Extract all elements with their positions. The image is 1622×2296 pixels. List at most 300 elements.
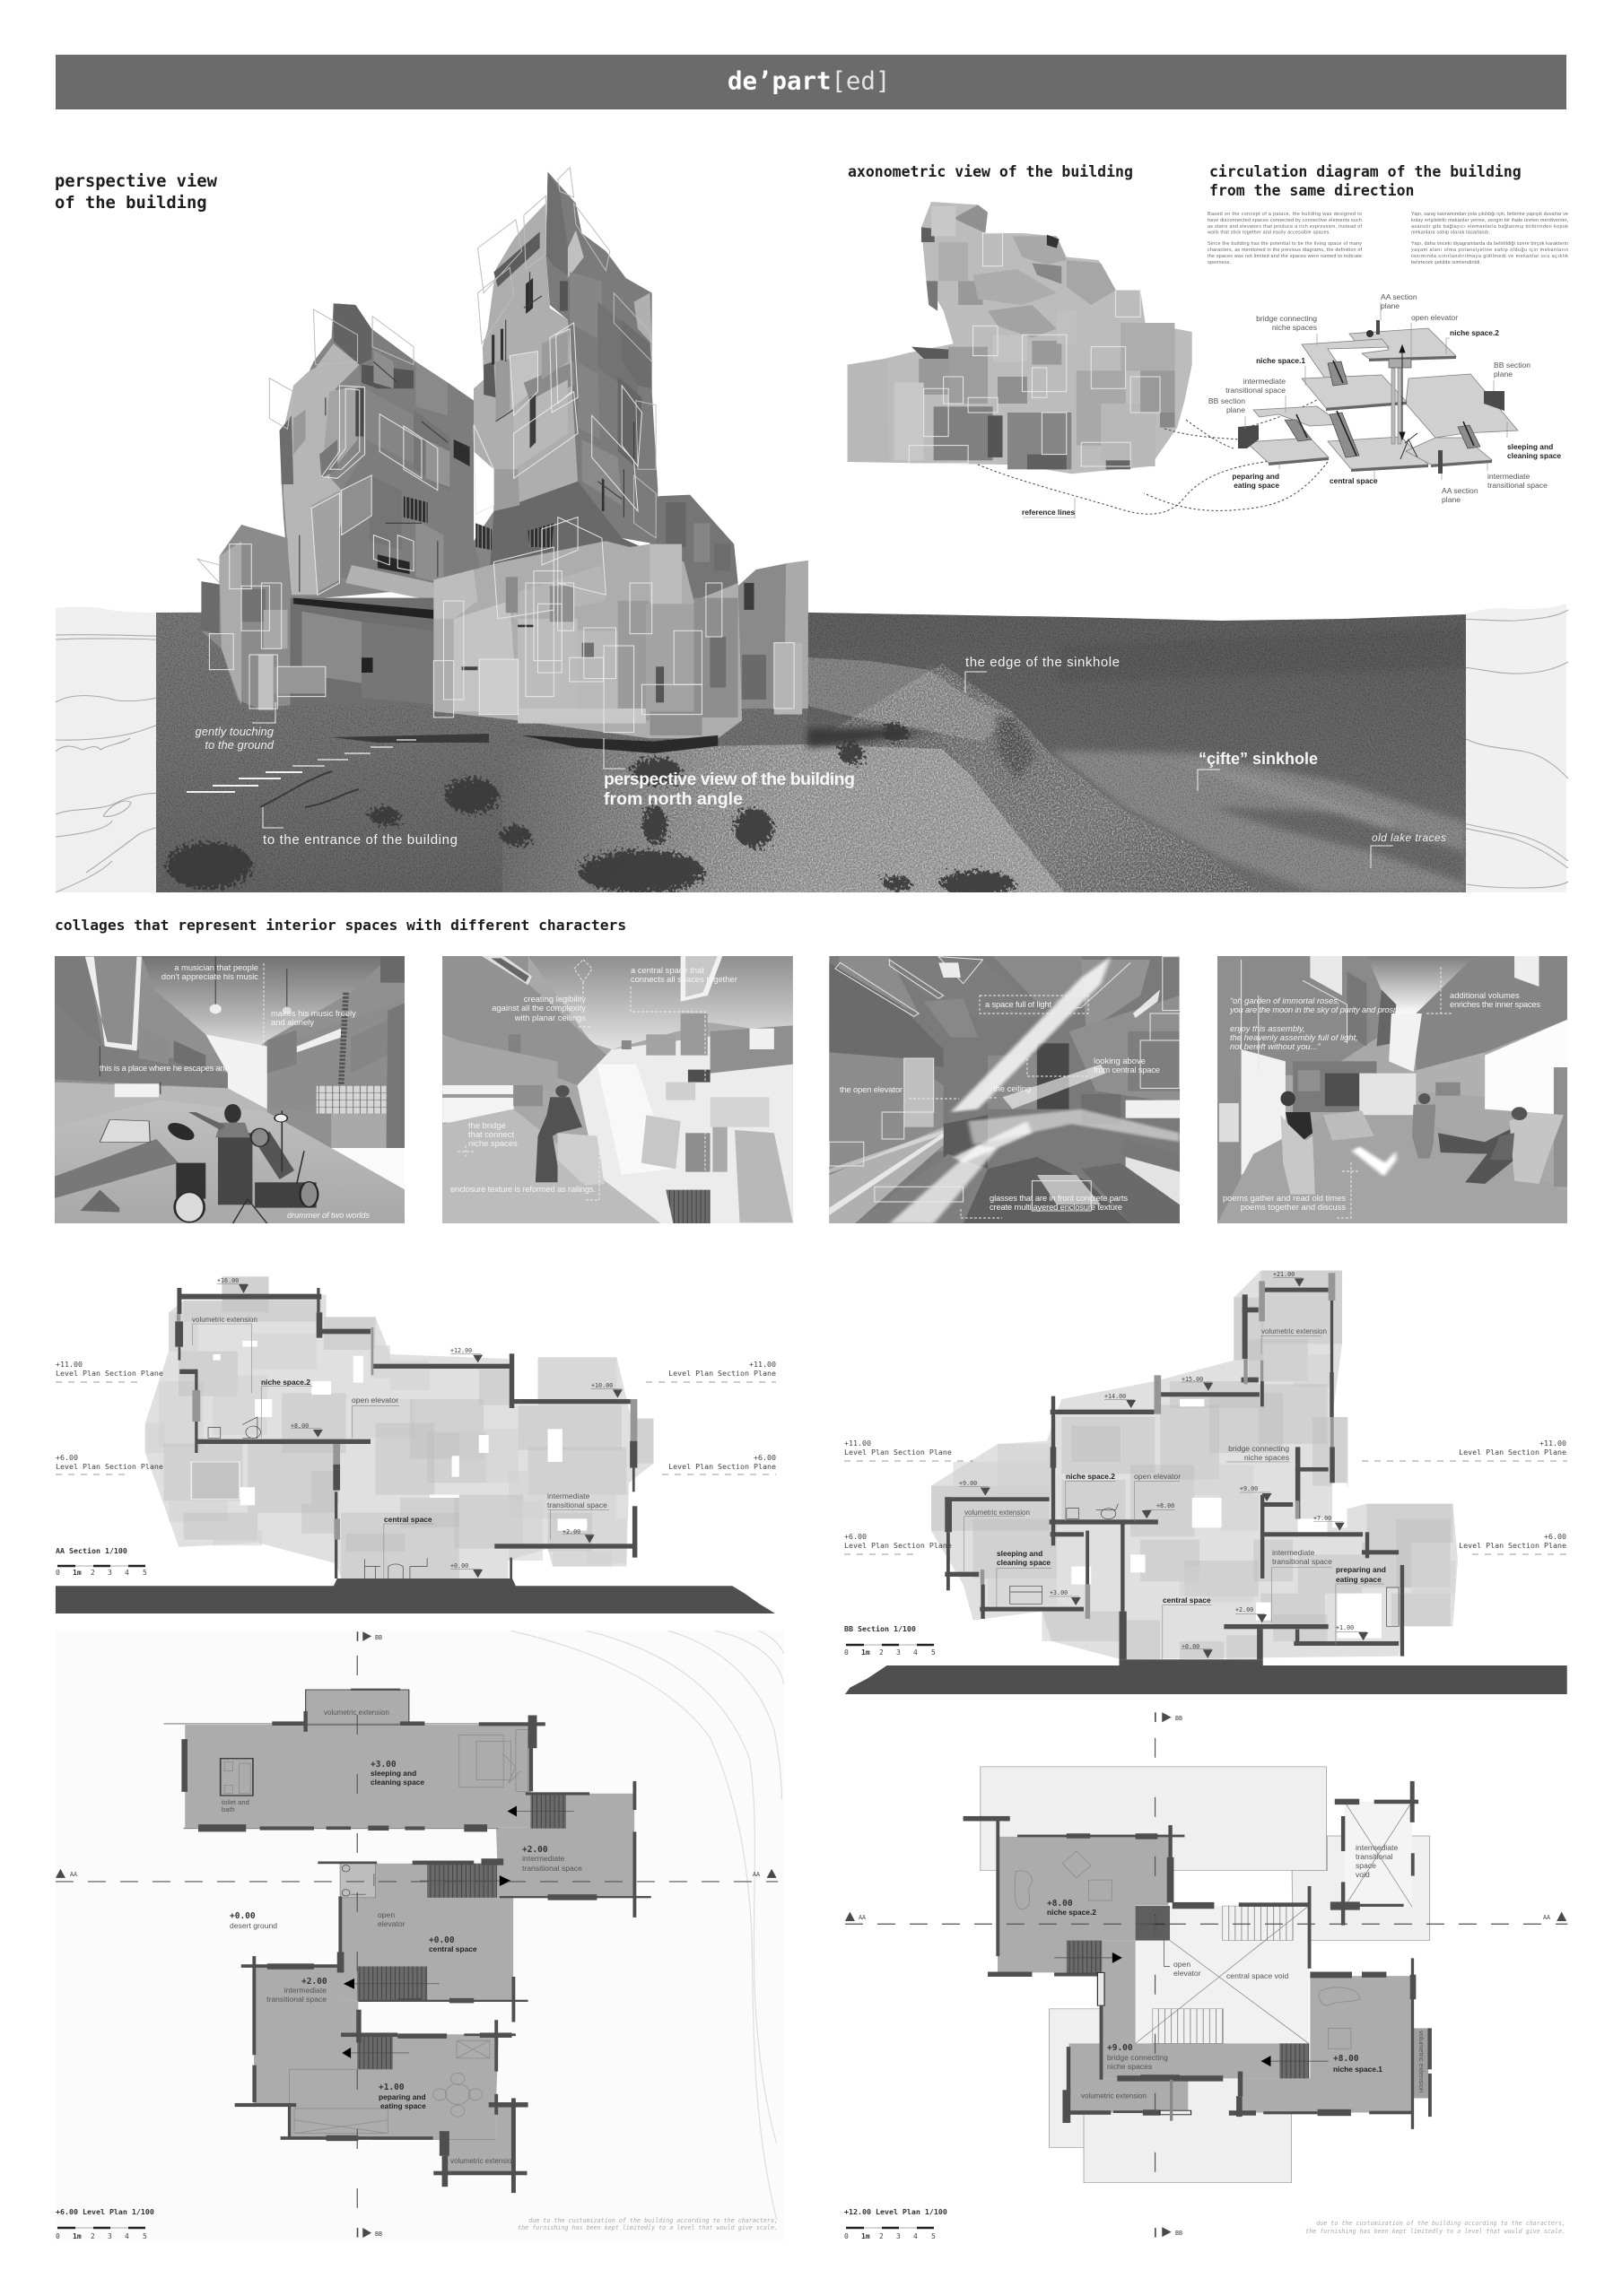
- AA section plane labels: +6.00: [56, 1453, 78, 1462]
- collage poets labels: “oh garden of immortal roses,: [1230, 996, 1339, 1005]
- plan +12.00 title and scale: 2: [879, 2232, 884, 2240]
- plan +6.00 labels: +0.00: [429, 1935, 455, 1945]
- label: gently touching: to the ground: [205, 738, 275, 752]
- section BB texts: +9.00: [1240, 1485, 1258, 1492]
- bridge counter: [558, 1133, 605, 1186]
- plan +6.00 title and scale: 1m: [73, 2232, 82, 2240]
- plan +6.00 title and scale: 5: [143, 2232, 147, 2240]
- ground: [56, 1578, 775, 1613]
- cliff face: [970, 701, 1263, 892]
- diagram labels: niche space.2: [1450, 328, 1499, 337]
- section AA texts: [192, 1277, 613, 1570]
- collage central space labels: connects all spaces together: [631, 974, 737, 984]
- diagram labels: sleeping and: [1507, 442, 1553, 451]
- entrance steps: [187, 740, 416, 792]
- section BB texts: niche spaces: [1244, 1453, 1289, 1462]
- AA section title and scale: 3: [108, 1569, 112, 1577]
- plan +6.00 labels: AA: [70, 1871, 77, 1878]
- plan +12.00 labels: transitional: [1356, 1852, 1393, 1861]
- diagram labels: plane: [1494, 370, 1513, 378]
- section BB texts: +15.00: [1182, 1376, 1203, 1383]
- far right wing: [738, 561, 808, 709]
- AA section plane labels: [56, 1360, 776, 1474]
- diagram labels: AA section: [1381, 292, 1417, 301]
- plan +6.00 labels: peparing and: [379, 2092, 426, 2101]
- plan +6.00 labels: +2.00: [301, 1977, 327, 1987]
- label: perspective view north angle: [604, 738, 855, 809]
- collage poets labels: poems gather and read old times: [1223, 1193, 1346, 1203]
- AA section title and scale: 4: [125, 1569, 129, 1577]
- AA section title and scale: [56, 1546, 147, 1577]
- section BB texts: bridge connecting: [1228, 1444, 1289, 1453]
- left tower lit side: [283, 344, 360, 595]
- section BB texts: volumetric extension: [1261, 1327, 1327, 1335]
- diagram labels: transitional space: [1225, 386, 1286, 395]
- plan: +6.00 level: [56, 1631, 784, 2240]
- diagram labels: central space: [1330, 476, 1378, 485]
- diagram labels: intermediate: [1487, 472, 1530, 481]
- BB section plane labels: Level Plan Section Plane: [844, 1448, 952, 1457]
- text block: english description: characters, as mentioned in the previous diagrams, the definition of: [1208, 248, 1362, 253]
- heading: collages: collages that represent interior spaces with different characters: [55, 917, 626, 934]
- section AA texts: +0.00: [450, 1562, 468, 1570]
- plan +12.00 labels: niche spaces: [1107, 2062, 1152, 2071]
- rocky foreground: [502, 744, 1072, 893]
- diagram labels: niche spaces: [1272, 323, 1317, 332]
- AA section plane labels: +6.00: [754, 1453, 776, 1462]
- plan +12.00 labels: void: [1356, 1870, 1370, 1879]
- collage musician labels: [100, 962, 370, 1220]
- text block: english description: [1207, 212, 1362, 265]
- sinkhole bowl: [1051, 751, 1466, 892]
- text block: english description: walls that stick together and easily accessible spaces.: [1207, 230, 1330, 235]
- plan +12.00 labels: +9.00: [1107, 2043, 1133, 2053]
- collage looking above labels: glasses that are in front concrete parts: [990, 1193, 1128, 1203]
- shadow band: [807, 728, 933, 748]
- right tower lit face: [474, 204, 578, 511]
- text block: english description: openness.: [1208, 260, 1231, 265]
- AA section plane labels: Level Plan Section Plane: [668, 1462, 776, 1471]
- section BB texts: +1.00: [1336, 1624, 1354, 1631]
- furniture: [221, 1730, 528, 2139]
- BB section title and scale: 2: [879, 1648, 884, 1657]
- plan +6.00 labels: transitional space: [522, 1864, 582, 1873]
- plan +12.00 title and scale: 0: [844, 2232, 849, 2240]
- AA section title and scale: 1m: [73, 1569, 82, 1577]
- plan +12.00 title and scale: 5: [931, 2232, 936, 2240]
- AA section title and scale: 2: [91, 1569, 95, 1577]
- level markers: [981, 1278, 1368, 1658]
- plan +6.00 labels: toilet and: [222, 1798, 249, 1806]
- plan +6.00 labels: transitional space: [266, 1995, 327, 2004]
- text block: english description: as stairs and elevators that produce a rich expression, instead of: [1208, 224, 1362, 230]
- section AA texts: open elevator: [352, 1396, 398, 1405]
- collage central space labels: [450, 960, 737, 1200]
- BB section title and scale: BB Section 1/100: [844, 1624, 916, 1633]
- section BB texts: sleeping and: [997, 1549, 1042, 1558]
- BB section plane labels: +11.00: [1539, 1439, 1566, 1448]
- AA section plane labels: +11.00: [56, 1360, 83, 1369]
- collage central space labels: niche spaces: [468, 1138, 518, 1148]
- BB section plane labels: [844, 1439, 1567, 1554]
- furniture: [1015, 1851, 1359, 2048]
- AA section drawing: [56, 1276, 776, 1613]
- BB section title and scale: 1m: [861, 1648, 870, 1657]
- label: old lake traces: [1371, 831, 1446, 868]
- collage looking above labels: create multilayered enclosure texture: [990, 1202, 1122, 1212]
- plan +12.00 labels: volumetric extension: [1417, 2031, 1426, 2092]
- plan +12.00 labels: bridge connecting: [1107, 2053, 1168, 2062]
- elevator: [1136, 1906, 1170, 1941]
- texture noise: [156, 610, 1466, 893]
- text block: turkish description: [1411, 212, 1568, 265]
- heading: axonometric view: axonometric view of the building: [848, 163, 1133, 180]
- diagram labels: plane: [1381, 301, 1400, 310]
- text block: turkish description: kolay erişilebilir mekanlar yerine, zengin bir ifade üreten merdivenler,: [1411, 218, 1568, 223]
- collage musician labels: drummer of two worlds: [287, 1210, 370, 1220]
- title bar: [56, 55, 1566, 109]
- stairs: [357, 1794, 566, 2069]
- collage central space labels: a central space that: [631, 965, 704, 975]
- plan +6.00 labels: +2.00: [522, 1845, 548, 1855]
- section BB texts: eating space: [1336, 1575, 1382, 1584]
- BB section title and scale: [844, 1624, 936, 1657]
- heading: circulation diagram: from the same direction: [1209, 182, 1414, 199]
- section cut lines: [56, 1881, 778, 1883]
- heading: perspective view: [55, 172, 218, 213]
- BB section title and scale: 4: [913, 1648, 918, 1657]
- left tower dark face: [334, 303, 482, 601]
- BB section title and scale: 5: [931, 1648, 936, 1657]
- plan +6.00 note: due to the customization of the building according to the characters,: [528, 2217, 778, 2224]
- diagram labels: BB section: [1494, 361, 1530, 370]
- walls: [164, 1689, 651, 2193]
- heading: perspective view: perspective view: [55, 172, 218, 191]
- base silhouettes: [282, 303, 493, 601]
- BB section plane labels: Level Plan Section Plane: [1459, 1448, 1566, 1457]
- plan: +12.00 level: [844, 1712, 1567, 2240]
- section BB texts: +9.00: [959, 1480, 977, 1487]
- diagram labels: [1022, 292, 1561, 517]
- plan +6.00 labels: +1.00: [379, 2083, 405, 2092]
- plan +12.00 labels: AA: [1543, 1914, 1550, 1921]
- walls: [964, 1781, 1432, 2129]
- BB section plane labels: Level Plan Section Plane: [844, 1541, 952, 1550]
- collage central space labels: against all the complexity: [492, 1003, 586, 1013]
- collage central space labels: that connect: [468, 1129, 514, 1139]
- text block: english description: have disconnected spaces connected by connective elements such: [1208, 218, 1362, 223]
- arrows: [342, 1805, 517, 2058]
- plate edges: [1269, 356, 1492, 472]
- plan +12.00 labels: +8.00: [1047, 1899, 1073, 1909]
- AA section plane labels: Level Plan Section Plane: [56, 1462, 163, 1471]
- AA section plane labels: +11.00: [749, 1360, 776, 1369]
- tower underside: [490, 482, 642, 574]
- plan +12.00 note: due to the customization of the building according to the characters,: [1316, 2220, 1565, 2227]
- plan +6.00 labels: elevator: [378, 1919, 406, 1928]
- text block: turkish description: tanımında sınırlandırılmaya gidilmedi ve mekanlar ucu açıklık: [1411, 254, 1568, 259]
- section BB texts: +7.00: [1313, 1515, 1331, 1522]
- landscape labels: [187, 655, 1446, 868]
- label: gently touching: gently touching: [196, 725, 275, 738]
- diagram labels: peparing and: [1232, 472, 1279, 481]
- leader lines: [1023, 302, 1507, 518]
- level markers: [239, 1284, 623, 1578]
- plan +6.00 note: the furnishing has been kept limitedly to a level that would give scale.: [518, 2224, 778, 2231]
- plan +12.00 title and scale: 4: [913, 2232, 918, 2240]
- collage looking above labels: the open elevator: [840, 1084, 903, 1094]
- section cut lines: [845, 1923, 1567, 1925]
- section walls and slabs: [945, 1288, 1404, 1659]
- diagram labels: plane: [1226, 405, 1245, 414]
- label: edge of sinkhole: the edge of the sinkhole: [965, 655, 1120, 670]
- BB section plane labels: +6.00: [1544, 1532, 1566, 1541]
- collage musician labels: this is a place where he escapes and hides in: [100, 1063, 258, 1073]
- stairs: [1285, 361, 1480, 457]
- label: to the entrance: [263, 807, 458, 848]
- axonometric drawing: [848, 202, 1192, 474]
- collage musician labels: a musician that people: [174, 962, 258, 972]
- plan +12.00 labels: volumetric extension: [1081, 2092, 1147, 2100]
- section AA texts: +2.00: [562, 1528, 580, 1535]
- panel: left side lake traces: [56, 606, 178, 892]
- section AA texts: transitional space: [547, 1500, 607, 1509]
- text block: english description: the spaces was not limited and the spaces were named to indicate: [1208, 254, 1362, 259]
- far left wing: [201, 525, 302, 709]
- diagram labels: AA section: [1442, 486, 1478, 495]
- heading: circulation diagram: [1209, 163, 1522, 199]
- section markers: [56, 1631, 777, 2238]
- text block: english description: Based on the concept of a palace, the building was designed to: [1208, 212, 1362, 217]
- diagram labels: intermediate: [1243, 377, 1286, 386]
- plan +6.00 labels: desert ground: [230, 1921, 277, 1930]
- plan +12.00 labels: BB: [1175, 2230, 1182, 2237]
- diagram labels: open elevator: [1411, 313, 1458, 322]
- panel: collage central space: [442, 956, 793, 1223]
- diagram labels: bridge connecting: [1256, 314, 1317, 323]
- BB section drawing: [844, 1271, 1567, 1694]
- seated poets: [1438, 1107, 1564, 1184]
- plan +6.00 labels: central space: [429, 1944, 477, 1953]
- panel: landscape photo with sinkhole: [156, 610, 1466, 896]
- plan +6.00 labels: AA: [753, 1871, 760, 1878]
- standing poet: [1412, 1093, 1435, 1159]
- plan +12.00 labels: open: [1173, 1960, 1190, 1969]
- plan +6.00 title and scale: 3: [108, 2232, 112, 2240]
- far wall of the sinkhole: [807, 610, 1466, 893]
- plan +12.00 labels: niche space.2: [1047, 1908, 1096, 1917]
- label: to the entrance: to the entrance of the building: [263, 832, 458, 848]
- plan +12.00 labels: central space void: [1226, 1971, 1288, 1980]
- section AA texts: +16.00: [217, 1277, 239, 1284]
- central void: [1136, 1906, 1309, 2043]
- diagram labels: niche space.1: [1256, 356, 1305, 365]
- section BB texts: [959, 1271, 1386, 1650]
- section BB texts: +2.00: [1235, 1606, 1253, 1613]
- text block: turkish description: belirtecek şekilde isimlendirildi.: [1411, 260, 1481, 265]
- plan +12.00 title and scale: [844, 2207, 947, 2240]
- lake trace contours: [510, 1631, 784, 2220]
- plan +12.00 labels: elevator: [1173, 1969, 1201, 1978]
- plan +6.00 labels: volumetric extension: [450, 2157, 516, 2165]
- collage musician labels: and alonely: [271, 1017, 314, 1027]
- section BB texts: central space: [1163, 1596, 1211, 1605]
- collage poets labels: [1223, 967, 1540, 1218]
- white wireframes over the building: [477, 220, 522, 293]
- collage poets labels: enjoy this assembly,: [1230, 1023, 1305, 1033]
- stairs: [1067, 1941, 1102, 1975]
- section AA texts: +8.00: [291, 1422, 309, 1430]
- floors: [998, 1837, 1428, 2113]
- text block: turkish description: yaşam alanı olma potansiyeline sahip olduğu için mekanların: [1411, 248, 1568, 253]
- floor plates: [1246, 328, 1518, 469]
- plan +12.00 title and scale: +12.00 Level Plan 1/100: [844, 2207, 947, 2216]
- AA section plane labels: Level Plan Section Plane: [668, 1369, 776, 1378]
- plan +6.00 note: [518, 2217, 778, 2231]
- ground left: [156, 610, 874, 893]
- section BB texts: volumetric extension: [964, 1509, 1030, 1517]
- section BB texts: preparing and: [1336, 1565, 1386, 1574]
- AA section plane labels: Level Plan Section Plane: [56, 1369, 163, 1378]
- section walls and slabs: [175, 1288, 637, 1585]
- elevator: [1389, 345, 1417, 459]
- plan +6.00 labels: intermediate: [522, 1854, 565, 1863]
- plan +6.00 labels: eating space: [380, 2101, 426, 2110]
- collage central space labels: the bridge: [468, 1120, 506, 1130]
- furniture: [208, 1417, 427, 1578]
- plan +12.00 labels: intermediate: [1356, 1843, 1399, 1852]
- collage poets labels: enriches the inner spaces: [1450, 999, 1540, 1009]
- text block: english description: Since the building has the potential to be the living space of many: [1208, 241, 1362, 247]
- text block: turkish description: Yapı, daha önceki diyagramlarda da belirtildiği üzere birçok karakterin: [1411, 241, 1568, 247]
- BB section title and scale: 3: [896, 1648, 901, 1657]
- AA section title and scale: 5: [143, 1569, 147, 1577]
- ground: [845, 1659, 1567, 1694]
- left dark block: [291, 598, 434, 706]
- collage looking above labels: [840, 996, 1160, 1218]
- heading: perspective view: of the building: [55, 194, 207, 213]
- plan +6.00 labels: BB: [375, 2231, 382, 2238]
- plan +6.00 title and scale: [56, 2207, 154, 2240]
- text block: turkish description: Yapı, saray kavramından yola çıkıldığı için, birbirine yapışık duvarlar ve: [1411, 212, 1568, 217]
- title bar: de’part[ed]: [728, 68, 890, 95]
- collage looking above labels: a space full of light: [985, 999, 1051, 1009]
- section AA texts: intermediate: [547, 1492, 590, 1500]
- circulation diagram: [978, 292, 1561, 518]
- section BB texts: +0.00: [1182, 1643, 1199, 1650]
- label: perspective view north angle: perspective view of the building: [604, 770, 855, 789]
- plan +12.00 note: [1305, 2220, 1565, 2235]
- collage poets labels: the heavenly assembly full of light,: [1230, 1032, 1358, 1042]
- text block: turkish description: mekanlara sahip olarak tasarlandı.: [1411, 230, 1490, 235]
- plan +6.00 title and scale: 2: [91, 2232, 95, 2240]
- arrows: [1112, 1952, 1270, 2066]
- section plane markers: [1238, 320, 1504, 474]
- panel: collage musician: [55, 956, 405, 1223]
- plan +6.00 labels: [70, 1634, 760, 2238]
- plan +6.00 title and scale: +6.00 Level Plan 1/100: [56, 2207, 154, 2216]
- diagram labels: cleaning space: [1507, 451, 1561, 460]
- woman in robe: [1280, 1091, 1315, 1195]
- panel: collage poets: [1217, 956, 1567, 1223]
- headland: [807, 657, 1012, 742]
- furniture: [1010, 1504, 1399, 1626]
- section BB texts: open elevator: [1134, 1472, 1181, 1481]
- intermediate void: [1345, 1802, 1412, 1907]
- bushes: [166, 724, 1016, 896]
- section BB texts: cleaning space: [997, 1558, 1051, 1567]
- volume cloud: [931, 1271, 1458, 1659]
- diagram labels: BB section: [1208, 396, 1245, 405]
- heading: circulation diagram: circulation diagram of the building: [1209, 163, 1522, 180]
- diagram labels: eating space: [1234, 481, 1279, 490]
- collage central space labels: creating legibility: [524, 994, 586, 1004]
- collage poets labels: you are the moon in the sky of purity and prosperity: [1229, 1004, 1414, 1014]
- plan +6.00 labels: +0.00: [230, 1911, 256, 1921]
- label: cifte sinkhole: “çifte” sinkhole: [1199, 750, 1318, 768]
- label: cifte sinkhole: [1198, 750, 1318, 791]
- section BB texts: transitional space: [1272, 1557, 1332, 1566]
- floors: [185, 1690, 634, 2173]
- section BB texts: niche space.2: [1066, 1472, 1115, 1481]
- plan +12.00 note: the furnishing has been kept limitedly to a level that would give scale.: [1305, 2228, 1565, 2235]
- plan +12.00 labels: niche space.1: [1333, 2065, 1382, 2074]
- standing person: [536, 1085, 582, 1182]
- section BB texts: +21.00: [1273, 1271, 1295, 1278]
- front lit mass: [433, 541, 742, 738]
- collage looking above labels: looking above: [1094, 1056, 1146, 1065]
- label: perspective view north angle: from north angle: [604, 789, 743, 809]
- collage central space labels: with planar ceilings: [514, 1013, 586, 1022]
- plan +12.00 labels: +8.00: [1333, 2054, 1359, 2064]
- section BB texts: intermediate: [1272, 1548, 1315, 1557]
- collage musician labels: don't appreciate his music: [161, 971, 258, 981]
- plan +12.00 labels: space: [1356, 1861, 1376, 1870]
- section AA texts: niche space.2: [261, 1378, 310, 1387]
- collage central space labels: enclosure texture is reformed as railings.: [450, 1184, 596, 1194]
- plan +12.00 labels: AA: [859, 1914, 866, 1921]
- label: old lake traces: old lake traces: [1372, 831, 1446, 844]
- plan +6.00 labels: bath: [222, 1805, 235, 1813]
- diagram labels: transitional space: [1487, 481, 1548, 490]
- panel: right side lake traces: [1417, 604, 1568, 892]
- plan +6.00 labels: open: [378, 1910, 395, 1919]
- right tower dark face: [545, 172, 658, 544]
- plan +6.00 labels: intermediate: [284, 1986, 327, 1995]
- dark detail lines: [300, 272, 634, 592]
- section AA texts: volumetric extension: [192, 1316, 257, 1324]
- BB section title and scale: 0: [844, 1648, 849, 1657]
- collage poets labels: additional volumes: [1450, 990, 1520, 1000]
- plan +6.00 labels: sleeping and: [371, 1769, 416, 1778]
- drummer and drum kit: [80, 1104, 318, 1223]
- plan +6.00 labels: volumetric extension: [324, 1709, 389, 1717]
- desert stipple ground: [56, 1631, 784, 2240]
- reference lines: [978, 395, 1328, 514]
- section markers: [845, 1712, 1566, 2238]
- plan +12.00 title and scale: 3: [896, 2232, 901, 2240]
- section AA texts: central space: [384, 1515, 432, 1524]
- section BB texts: +8.00: [1156, 1502, 1174, 1509]
- diagram labels: reference lines: [1022, 508, 1075, 517]
- BB section plane labels: Level Plan Section Plane: [1459, 1541, 1566, 1550]
- light beams: [829, 957, 1180, 1223]
- plan +12.00 labels: [859, 1715, 1550, 2237]
- plan +6.00 labels: BB: [375, 1634, 382, 1641]
- collage poets labels: not bereft without you...”: [1230, 1041, 1321, 1051]
- label: edge of sinkhole: [965, 655, 1120, 693]
- roof overhangs: [981, 1767, 1430, 2183]
